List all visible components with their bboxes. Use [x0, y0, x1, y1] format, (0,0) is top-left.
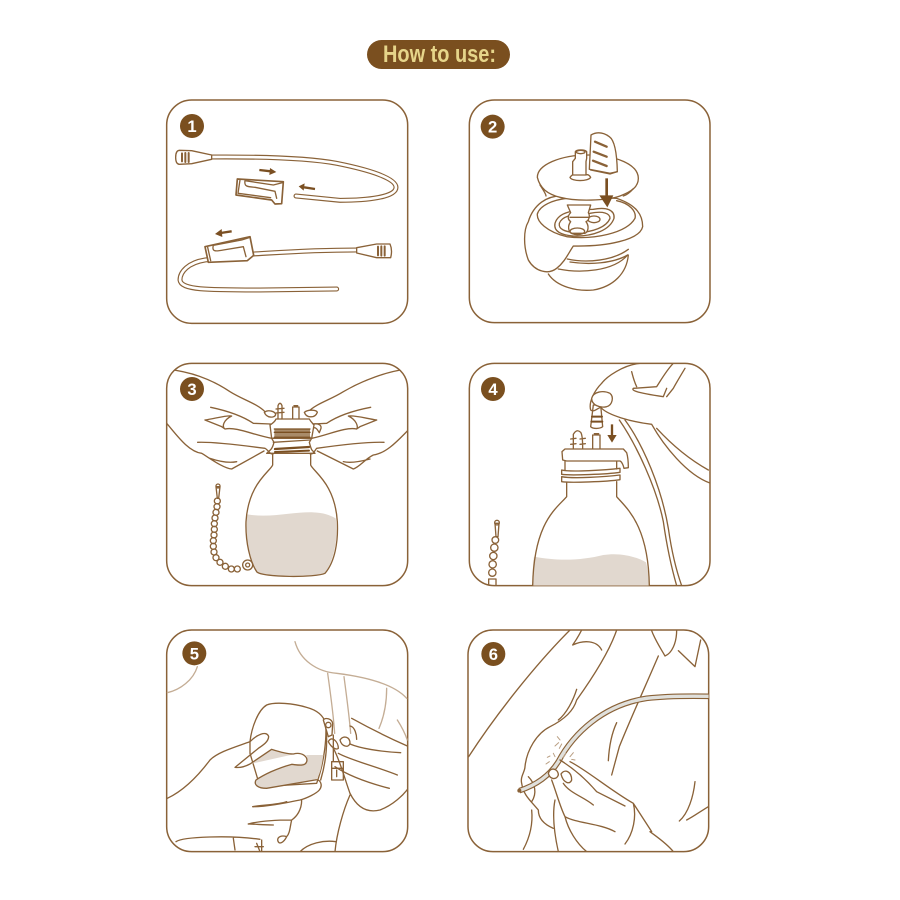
left hand — [167, 734, 321, 843]
panel: step 5 — [167, 630, 408, 852]
panel: step 6 — [468, 630, 709, 852]
milk — [247, 512, 337, 576]
number badge 2 — [481, 115, 505, 139]
posts — [571, 431, 600, 448]
number badge 1 — [180, 114, 204, 138]
connector — [591, 405, 603, 428]
fingers and tube — [619, 420, 682, 586]
number badge 5 — [182, 641, 206, 665]
body background lines — [167, 642, 407, 740]
arrow: assembled left — [215, 229, 232, 237]
panel: step 1 — [167, 100, 408, 323]
number badge 6: 6 — [489, 645, 498, 664]
left hand — [167, 369, 273, 469]
upper tube — [176, 150, 396, 200]
pinching hand — [548, 760, 673, 852]
right hand — [308, 369, 408, 469]
number badge 5: 5 — [190, 644, 199, 663]
top disc — [537, 155, 638, 200]
catheter tube — [517, 696, 709, 793]
tag — [589, 133, 617, 174]
number badge 6 — [481, 642, 505, 666]
arrow: down — [599, 178, 613, 207]
barbed and plain posts — [276, 403, 299, 419]
bottle — [246, 454, 338, 576]
milk — [250, 749, 323, 788]
arrow: clip right — [259, 168, 276, 175]
bead strap — [489, 520, 499, 586]
lower ring and tongue — [525, 196, 643, 290]
milk — [533, 554, 649, 586]
cap — [562, 449, 628, 468]
arrow: tube left — [299, 183, 315, 191]
connectors — [323, 719, 357, 780]
bottle threads — [562, 468, 620, 482]
bottle — [250, 703, 326, 787]
number badge 1: 1 — [187, 117, 197, 136]
cap — [267, 419, 321, 453]
number badge 4 — [481, 377, 505, 401]
body outlines — [469, 630, 708, 849]
number badge 2: 2 — [488, 118, 497, 137]
bottle — [533, 482, 649, 586]
dashed milk spray — [546, 737, 575, 764]
post — [570, 150, 591, 181]
panel: step 2 — [469, 100, 710, 323]
lower tube with clip — [180, 237, 392, 290]
panel: step 4 — [469, 363, 711, 586]
number badge 3 — [180, 377, 204, 401]
bead strap — [210, 484, 253, 572]
number badge 3: 3 — [187, 380, 197, 399]
arrow: down — [607, 424, 617, 443]
right hand — [328, 737, 350, 749]
stem — [567, 205, 591, 235]
title: How to use: — [383, 41, 496, 68]
clip — [236, 179, 283, 204]
panel: step 3 — [167, 363, 408, 586]
number badge 4: 4 — [488, 380, 498, 399]
